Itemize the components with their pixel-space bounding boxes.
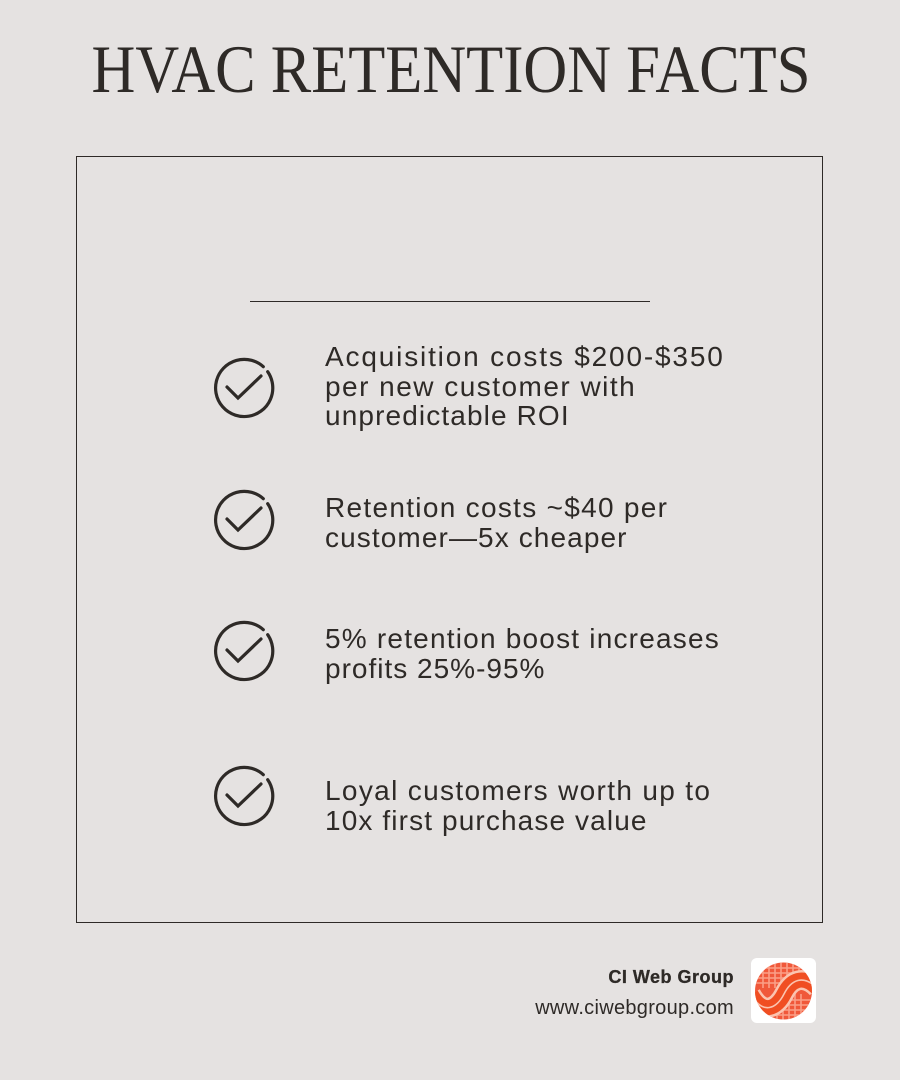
text: retention boost: 5% retention boost increases	[325, 623, 720, 654]
text: loyal customers: 10x first purchase value	[325, 804, 648, 836]
text: retention boost: profits 25%-95%	[325, 652, 545, 684]
text: acquisition: unpredictable ROI	[325, 400, 570, 431]
icon: logo	[751, 958, 816, 1023]
text: retention boost	[325, 623, 720, 684]
brand name: CI Web Group	[608, 967, 734, 987]
text: retention costs: Retention costs ~$40 per	[325, 492, 668, 523]
text: loyal customers	[325, 775, 711, 836]
text: retention costs: customer—5x cheaper	[325, 522, 628, 552]
text: loyal customers: Loyal customers worth up to	[325, 775, 711, 806]
panel: retention facts	[76, 156, 823, 923]
website url: www.ciwebgroup.com	[535, 997, 734, 1019]
icon: check 1	[214, 358, 274, 418]
text: retention costs	[325, 492, 668, 553]
title: HVAC RETENTION FACTS	[92, 31, 810, 107]
text: acquisition: Acquisition costs $200-$350	[325, 341, 725, 372]
icon: check 2	[214, 490, 274, 550]
icon: check 3	[214, 620, 274, 682]
text: acquisition	[325, 341, 725, 431]
icon: check 4	[214, 766, 274, 826]
text: acquisition: per new customer with	[325, 370, 636, 402]
divider line	[250, 301, 650, 302]
